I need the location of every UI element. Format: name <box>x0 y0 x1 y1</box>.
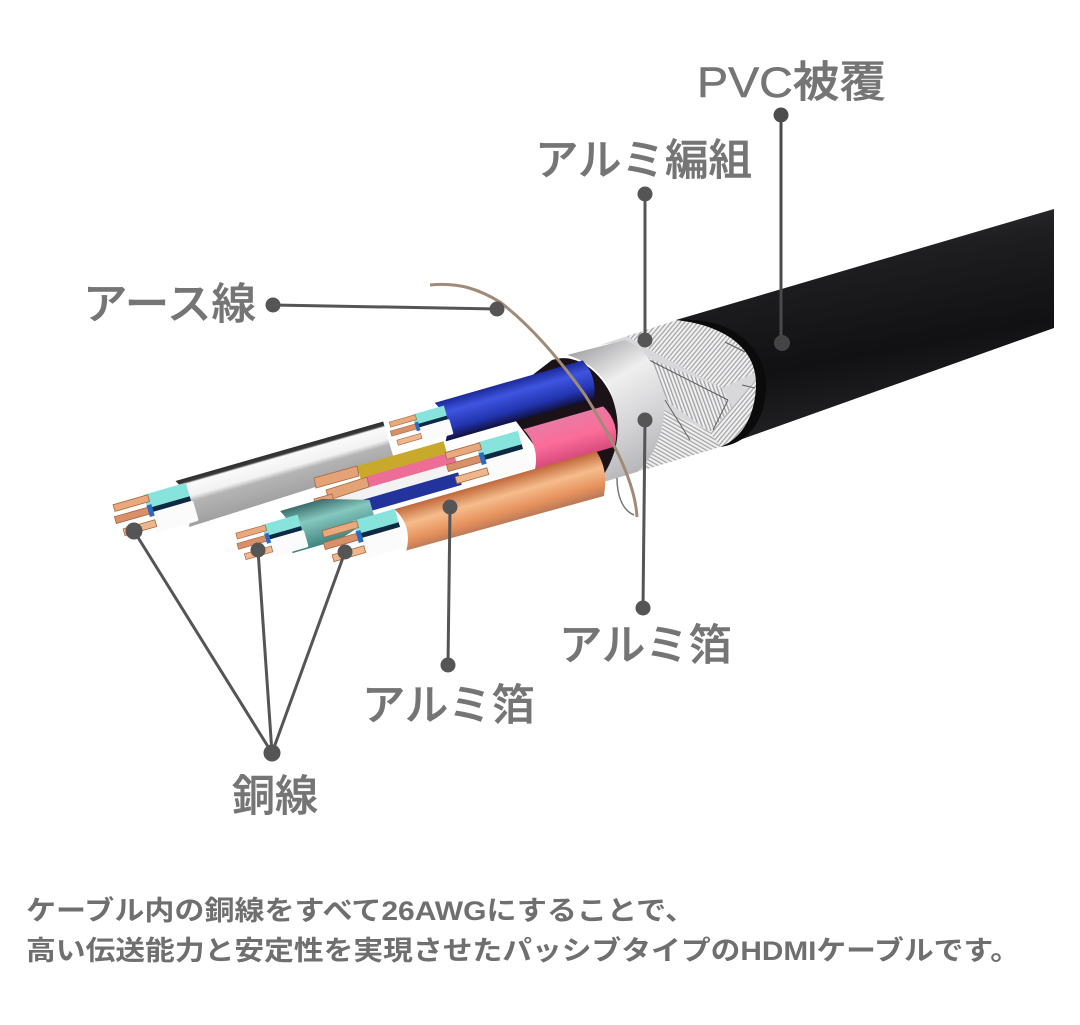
earth wire <box>430 284 637 517</box>
leader: PVC jacket <box>774 108 790 351</box>
orange foil tube <box>394 451 611 552</box>
blue foil tube <box>435 359 599 441</box>
label: aluminium foil left: アルミ箔 <box>362 682 535 730</box>
label: copper wire: 銅線 <box>232 773 318 821</box>
aluminium braid <box>600 320 756 472</box>
cable illustration <box>111 209 1054 569</box>
jacket front edge <box>676 320 766 447</box>
PVC jacket <box>676 209 1054 447</box>
leader: aluminium foil right <box>637 414 651 614</box>
leaders: copper wires <box>127 524 351 760</box>
footer text <box>26 895 1020 966</box>
footer text: ケーブル内の銅線をすべて26AWGにすることで、 <box>26 895 695 926</box>
cable interior <box>500 358 618 484</box>
label: PVC: PVC被覆 <box>697 59 886 107</box>
pink inner pair <box>365 452 456 488</box>
label: aluminium foil right: アルミ箔 <box>559 622 732 670</box>
leader: earth wire <box>267 299 503 315</box>
aluminium foil outer band <box>567 340 664 484</box>
label: earth wire: アース線 <box>83 281 256 329</box>
white inner pair <box>330 464 450 512</box>
footer text: 高い伝送能力と安定性を実現させたパッシブタイプのHDMIケーブルです。 <box>26 935 1020 966</box>
earth wire loop <box>617 478 634 515</box>
leader: aluminium braid <box>639 188 651 346</box>
navy inner pair <box>362 472 462 512</box>
leader: aluminium foil left <box>442 501 456 671</box>
green foil tube <box>280 486 378 553</box>
inner copper strands <box>314 466 369 523</box>
pink foil tube <box>523 405 621 470</box>
label: aluminium braid: アルミ編組 <box>535 137 752 185</box>
copper wire bundles <box>111 482 199 543</box>
yellow inner pair <box>357 441 447 479</box>
silver foil tube <box>176 421 396 527</box>
